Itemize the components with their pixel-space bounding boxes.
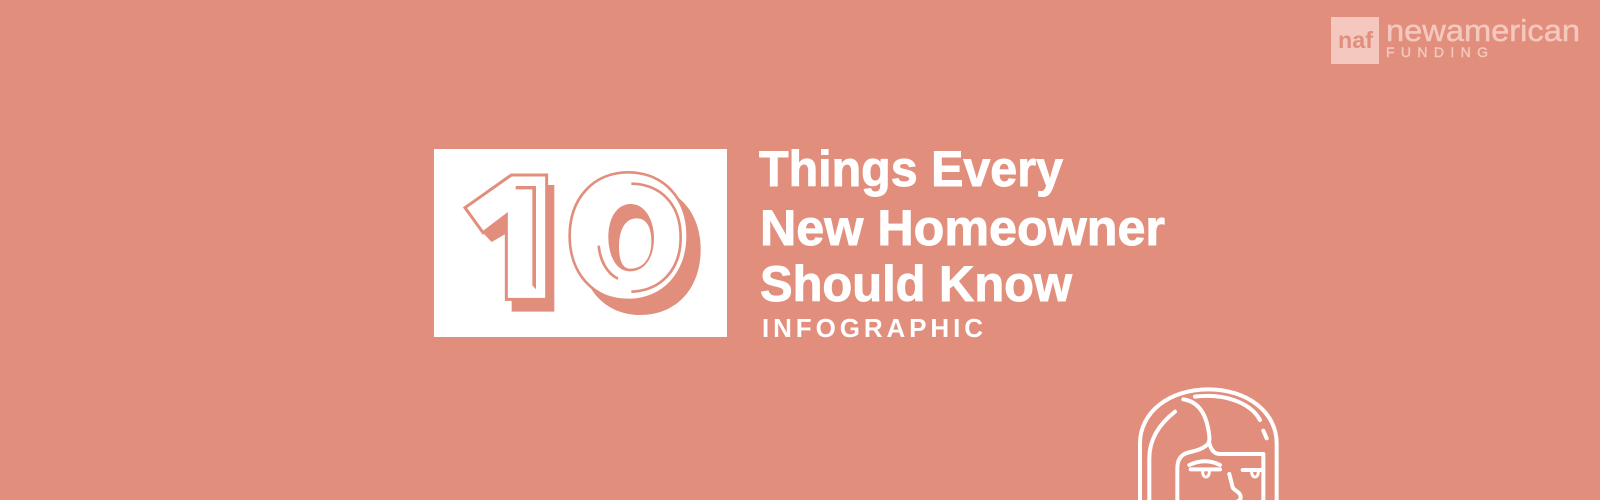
logo mark: naf square: naf: [1338, 27, 1373, 53]
hair parting and face: [1177, 399, 1209, 500]
digit 0 shadow: [581, 185, 701, 315]
left brow and eye: [1189, 461, 1220, 469]
title: Things Every: [759, 141, 1063, 197]
panel: white number box: [434, 149, 727, 337]
digit 1 shadow: [483, 185, 554, 312]
logo: New American Funding: [1331, 13, 1580, 64]
nose: [1229, 474, 1241, 500]
logo wordmark: newamerican: [1386, 13, 1580, 48]
subtitle: INFOGRAPHIC: [762, 313, 983, 343]
digit 0 body: [570, 172, 688, 300]
right brow and eye: [1243, 464, 1262, 476]
icon: woman with long hair: [1140, 389, 1277, 500]
digit 0 counter: [608, 204, 654, 271]
title: Should Know: [760, 256, 1072, 312]
hair outline: [1140, 389, 1277, 500]
hair inner strand: [1149, 412, 1175, 500]
logo subtitle: FUNDING: [1386, 44, 1488, 60]
digit 1 inner highlight: [516, 186, 536, 289]
hair highlight: [1195, 396, 1267, 438]
icon: number 10: [465, 172, 701, 315]
digit 1 outline: [465, 175, 547, 299]
title: [759, 141, 1165, 312]
logo mark: naf square: [1331, 17, 1379, 64]
title: New Homeowner: [760, 200, 1165, 256]
digit 0 highlight strokes: [599, 184, 681, 292]
